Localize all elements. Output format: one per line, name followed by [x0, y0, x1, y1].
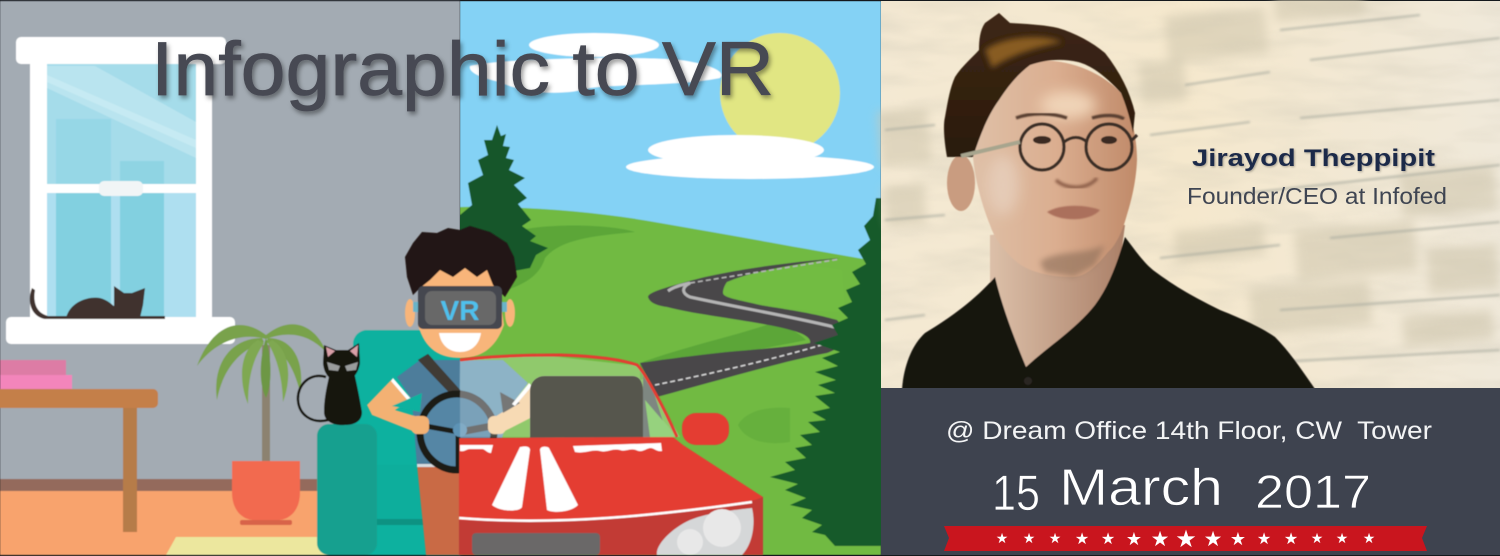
eyebrows	[1016, 114, 1124, 119]
ribbon with stars	[944, 526, 1427, 553]
speaker name: Jirayod Theppipit	[1192, 145, 1435, 172]
ribbon with stars: ★	[1311, 530, 1323, 546]
sun	[720, 33, 840, 153]
round glasses	[961, 124, 1137, 170]
bonnet stripes	[492, 446, 578, 512]
armchair	[317, 330, 473, 555]
ribbon with stars: ★	[1023, 530, 1035, 546]
ribbon with stars: ★	[1075, 531, 1089, 548]
ribbon with stars: ★	[1126, 529, 1142, 549]
clouds behind title	[470, 33, 722, 93]
cloud	[626, 135, 874, 179]
date: 2017	[1255, 465, 1371, 518]
window	[6, 37, 235, 344]
floor	[0, 491, 460, 555]
speaker portrait	[902, 13, 1315, 389]
date	[992, 459, 1371, 521]
panel: event details	[881, 388, 1500, 555]
ribbon with stars: ★	[1175, 526, 1197, 553]
title: Infographic to VR	[151, 27, 774, 112]
ribbon with stars: ★	[1284, 531, 1298, 548]
golden hair highlight	[985, 37, 1062, 68]
hair	[944, 13, 1135, 157]
panel: speaker photo	[869, 0, 1500, 391]
ribbon with stars: ★	[1151, 528, 1169, 551]
ribbon with stars: ★	[1049, 530, 1061, 546]
ribbon with stars: ★	[1336, 530, 1348, 546]
icon: small fir tree	[455, 125, 548, 271]
books	[0, 360, 72, 389]
green hill	[460, 207, 881, 555]
rug	[166, 537, 330, 555]
eyes	[1033, 136, 1117, 144]
ribbon with stars: ★	[996, 530, 1008, 546]
date: March	[1059, 459, 1223, 517]
stubble	[1040, 245, 1105, 277]
ear	[947, 155, 975, 211]
grille	[472, 533, 600, 555]
left arm	[367, 378, 428, 434]
ribbon with stars: ★	[1230, 529, 1246, 549]
right arm	[411, 383, 552, 434]
hair	[405, 226, 517, 297]
VR headset: VR	[441, 295, 479, 326]
venue: @ Dream Office 14th Floor, CW Tower	[946, 417, 1432, 445]
bonnet line	[459, 502, 752, 521]
VR headset	[413, 286, 507, 329]
head	[405, 258, 515, 358]
neck	[990, 225, 1125, 370]
seat belt	[418, 354, 462, 402]
collar button	[1024, 377, 1032, 385]
car bonnet	[459, 437, 763, 555]
trousers	[417, 465, 460, 555]
lower car body	[459, 497, 763, 555]
skirting board	[0, 479, 460, 491]
bonnet trim	[460, 443, 662, 453]
icon: cat on window sill	[30, 286, 165, 319]
icon: black cat on chair	[298, 343, 362, 425]
headlight	[657, 508, 754, 555]
brick wall	[869, 0, 1500, 391]
red car	[459, 355, 763, 555]
forehead highlight	[1040, 91, 1096, 119]
ribbon with stars: ★	[1363, 530, 1375, 546]
lips	[1047, 206, 1100, 219]
ribbon with stars: ★	[1101, 531, 1115, 548]
hill shadows	[510, 226, 806, 443]
cheek highlight	[987, 155, 1019, 215]
nose	[1056, 178, 1097, 187]
ribbon with stars: ★	[1257, 531, 1271, 548]
ribbon with stars: ★	[1204, 528, 1222, 551]
winding road	[640, 258, 843, 397]
driver figure	[367, 226, 552, 555]
black shirt	[902, 237, 1315, 389]
panel: grey room	[0, 1, 473, 555]
windscreen frame	[460, 355, 677, 437]
panel: countryside	[455, 1, 885, 555]
car seat	[460, 355, 680, 438]
icon: large fir tree	[770, 198, 885, 546]
steering wheel	[420, 394, 497, 470]
t-shirt	[397, 360, 528, 467]
speaker role: Founder/CEO at Infofed	[1187, 183, 1447, 209]
face	[973, 61, 1137, 277]
wing mirror	[682, 413, 729, 445]
potted plant	[197, 324, 326, 525]
table	[0, 389, 158, 532]
date: 15	[992, 465, 1040, 521]
